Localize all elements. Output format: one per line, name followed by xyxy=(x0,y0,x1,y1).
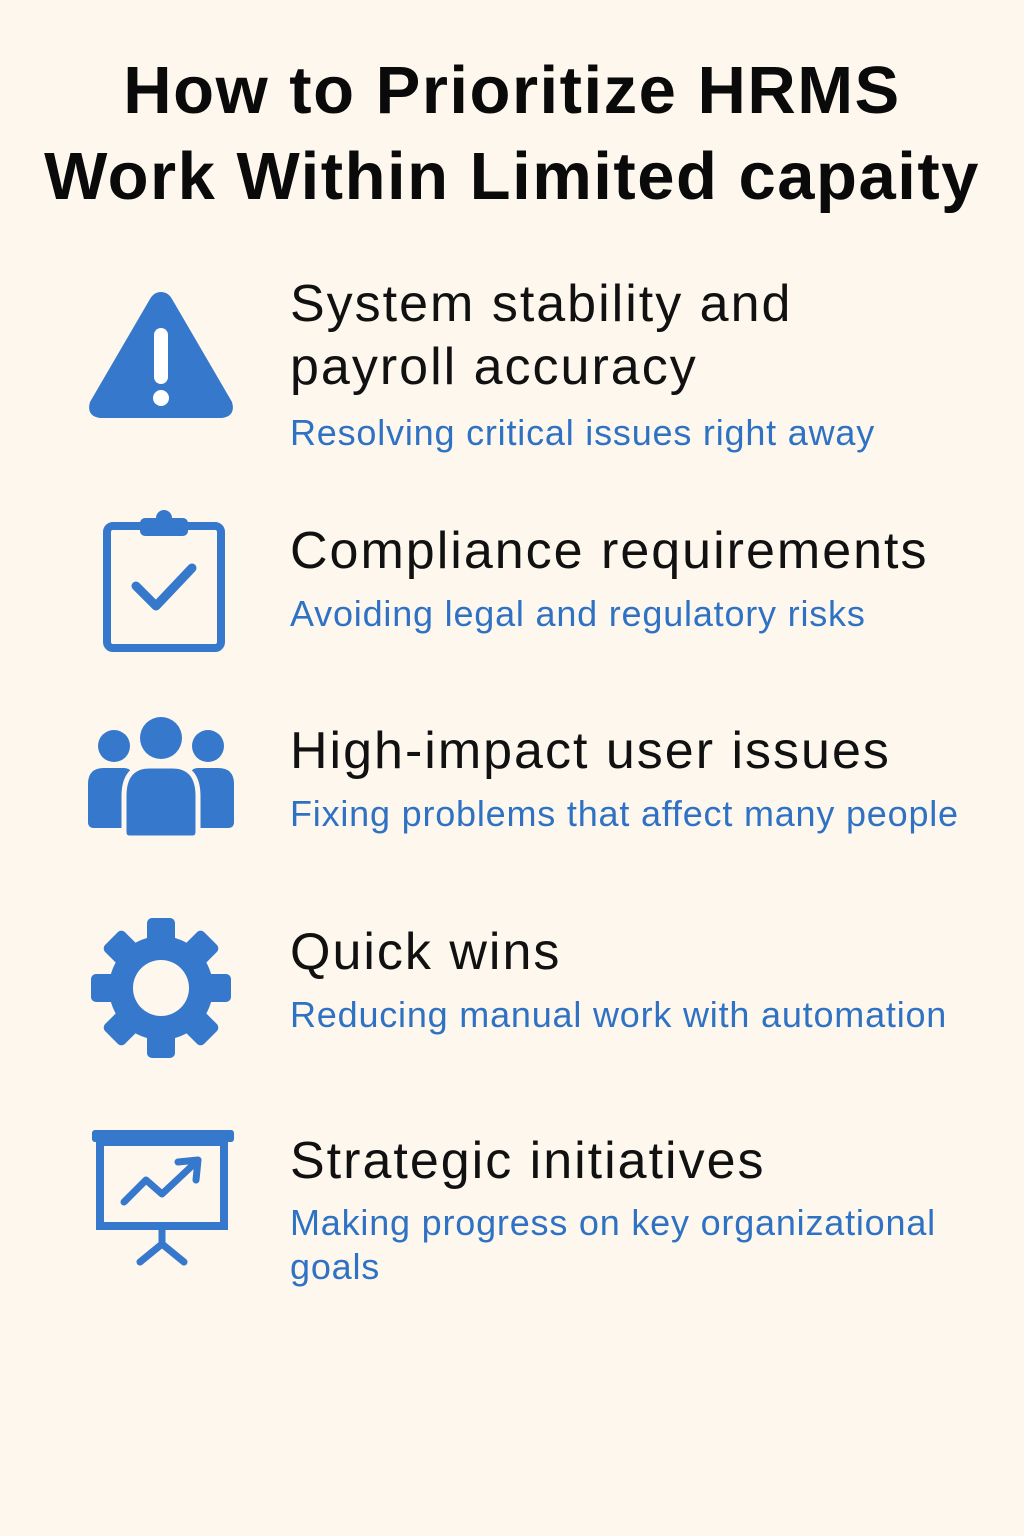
icon: gear xyxy=(91,918,231,1058)
heading: quick wins: Quick wins xyxy=(290,923,561,981)
icon: clipboard xyxy=(103,510,225,652)
heading: system stability: payroll accuracy xyxy=(290,338,698,396)
subtext: fixing: Fixing problems that affect many people xyxy=(290,793,959,834)
heading: strategic: Strategic initiatives xyxy=(290,1132,766,1190)
heading: system stability xyxy=(290,275,792,396)
heading: system stability: System stability and xyxy=(290,275,792,333)
subtext: resolving: Resolving critical issues right away xyxy=(290,412,875,453)
heading: compliance: Compliance requirements xyxy=(290,522,928,580)
icon: presentation chart xyxy=(92,1130,234,1266)
icon: warning triangle xyxy=(89,292,233,418)
subtext: making progress: goals xyxy=(290,1246,380,1287)
icon: people xyxy=(88,717,234,836)
subtext: making progress: Making progress on key organizational xyxy=(290,1202,936,1243)
heading: high-impact: High-impact user issues xyxy=(290,722,891,780)
title xyxy=(44,53,980,214)
subtext: reducing: Reducing manual work with automation xyxy=(290,994,947,1035)
title: How to Prioritize HRMS xyxy=(123,53,901,128)
subtext: avoiding: Avoiding legal and regulatory risks xyxy=(290,593,866,634)
title: Work Within Limited capaity xyxy=(44,139,980,214)
subtext: making progress xyxy=(290,1202,936,1287)
